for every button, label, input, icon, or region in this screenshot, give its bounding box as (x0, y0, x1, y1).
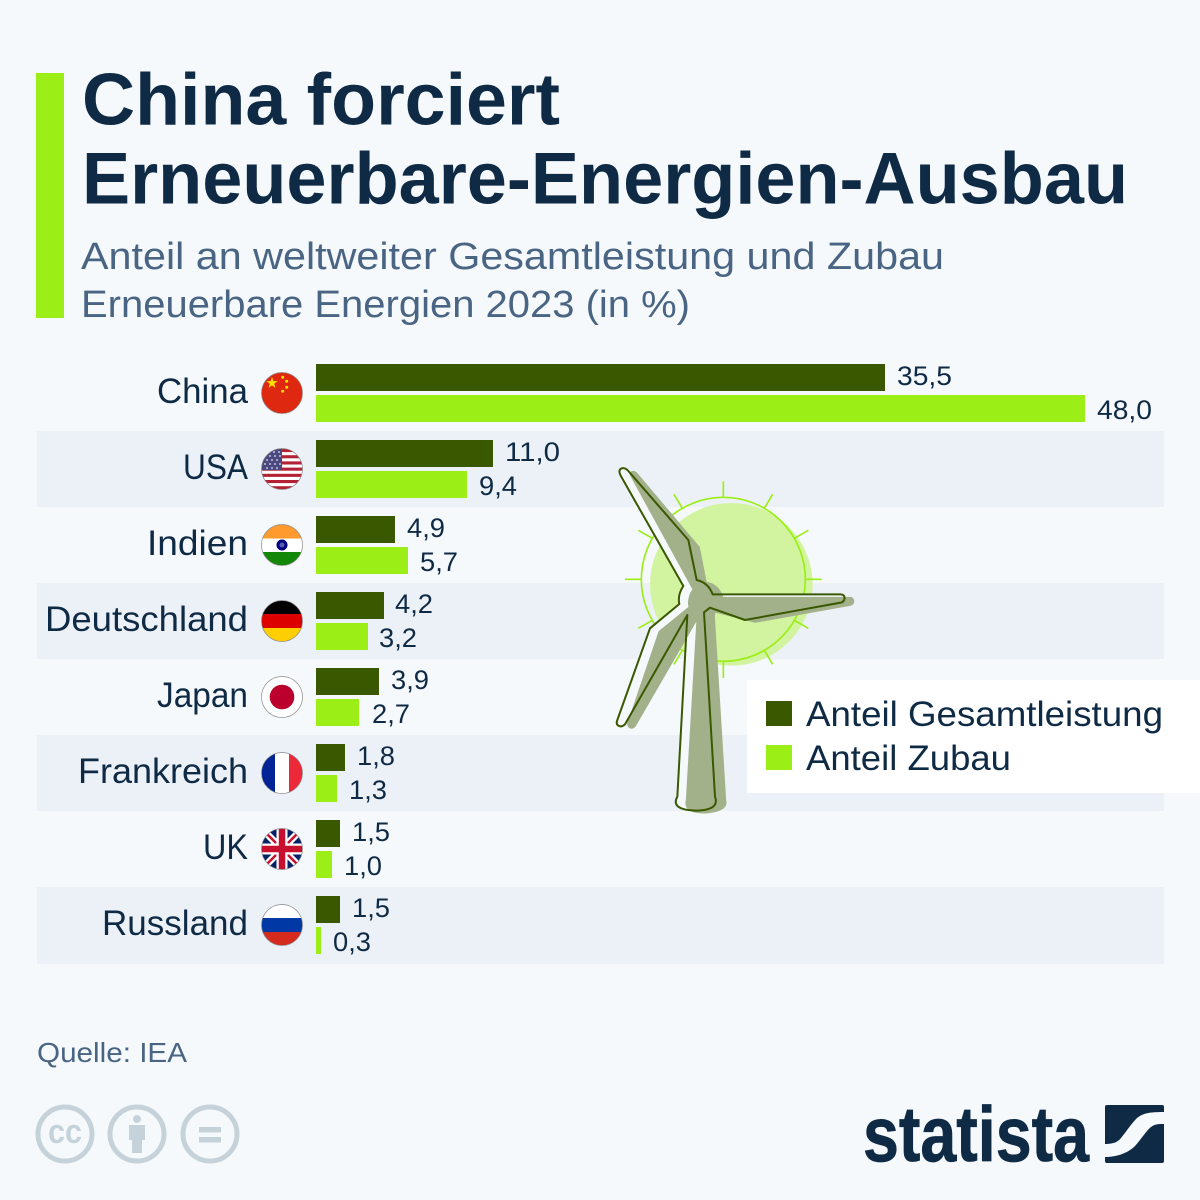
values: USA (479, 437, 560, 501)
icon: turbine shadow (628, 472, 853, 813)
row: Frankreich (78, 741, 395, 805)
values: Deutschland (379, 589, 433, 653)
values: Indien: 4,9 (407, 513, 445, 543)
icon: turbine body fill (617, 468, 845, 811)
flag: USA (261, 448, 303, 490)
row: USA (183, 437, 560, 501)
values: China: 48,0 (1097, 395, 1152, 425)
values: Frankreich: 1,8 (357, 741, 395, 771)
subtitle (81, 236, 944, 326)
title: China forciert (82, 60, 560, 140)
row: UK (206, 820, 389, 878)
icon: turbine outline (617, 468, 845, 811)
values: Indien (407, 513, 458, 577)
source: Quelle: IEA (37, 1037, 187, 1068)
legend label: Anteil Gesamtleistung: Anteil Gesamtleistung (806, 695, 1163, 734)
values: Japan (372, 665, 429, 729)
values: Frankreich (349, 741, 395, 805)
icon: cc (38, 1107, 92, 1161)
legend (747, 680, 1200, 793)
legend label: Anteil Zubau: Anteil Zubau (806, 739, 1011, 778)
accent bar (36, 73, 64, 318)
bars: UK (316, 820, 340, 878)
title (82, 60, 1128, 220)
row: China: China (157, 372, 249, 411)
values: Deutschland: 4,2 (395, 589, 433, 619)
flag: Japan (262, 676, 302, 718)
values: UK (344, 817, 390, 881)
bars: Japan (316, 668, 379, 726)
values: China: 35,5 (897, 361, 952, 391)
illustration: wind turbine with sun (617, 468, 853, 813)
row: Indien: Indien (147, 524, 248, 563)
subtitle: Anteil an weltweiter Gesamtleistung und Zubau (81, 236, 944, 278)
flag: France (261, 752, 303, 794)
subtitle: Erneuerbare Energien 2023 (in %) (81, 284, 690, 326)
values: USA: 11,0 (505, 437, 560, 467)
bars: Russland (316, 896, 340, 954)
statista wordmark: statista (863, 1090, 1090, 1178)
bars: USA (316, 440, 493, 498)
flag: Germany (261, 600, 303, 642)
statista logo (1104, 1105, 1165, 1163)
values: Indien: 5,7 (420, 547, 458, 577)
row: Russland: Russland (102, 904, 248, 943)
row: Japan (157, 665, 429, 729)
values: Japan: 3,9 (391, 665, 429, 695)
legend swatch: Anteil Gesamtleistung (766, 701, 792, 726)
bars: Indien (316, 516, 408, 574)
icon: sun (625, 481, 822, 678)
row: Japan: Japan (157, 676, 248, 715)
values: USA: 9,4 (479, 471, 517, 501)
flag: China (261, 372, 303, 414)
flag: Russia (261, 904, 303, 946)
values: Russland: 1,5 (352, 893, 390, 923)
row: UK: UK (203, 828, 248, 867)
values: Frankreich: 1,3 (349, 775, 387, 805)
icon: cc: cc (48, 1113, 82, 1151)
values: Japan: 2,7 (372, 699, 410, 729)
title: Erneuerbare-Energien-Ausbau (82, 138, 1128, 220)
flag: India (261, 524, 303, 566)
values: Russland (333, 893, 390, 957)
row: China (157, 361, 1152, 425)
values: China (897, 361, 1152, 425)
values: UK: 1,5 (352, 817, 390, 847)
bars: Deutschland (316, 592, 384, 650)
row: USA: USA (183, 448, 249, 487)
bars: Frankreich (316, 744, 345, 802)
row: Indien (147, 513, 458, 577)
icon: no derivatives (183, 1107, 237, 1161)
row: Frankreich: Frankreich (78, 752, 248, 791)
row: Deutschland (45, 589, 433, 653)
values: UK: 1,0 (344, 851, 382, 881)
legend swatch: Anteil Zubau (766, 745, 792, 770)
values: Deutschland: 3,2 (379, 623, 417, 653)
icon: attribution (110, 1107, 164, 1161)
flag: UK (261, 828, 303, 870)
row: Deutschland: Deutschland (45, 600, 248, 639)
values: Russland: 0,3 (333, 927, 371, 957)
bars: China (316, 364, 1085, 422)
row: Russland (102, 893, 390, 957)
